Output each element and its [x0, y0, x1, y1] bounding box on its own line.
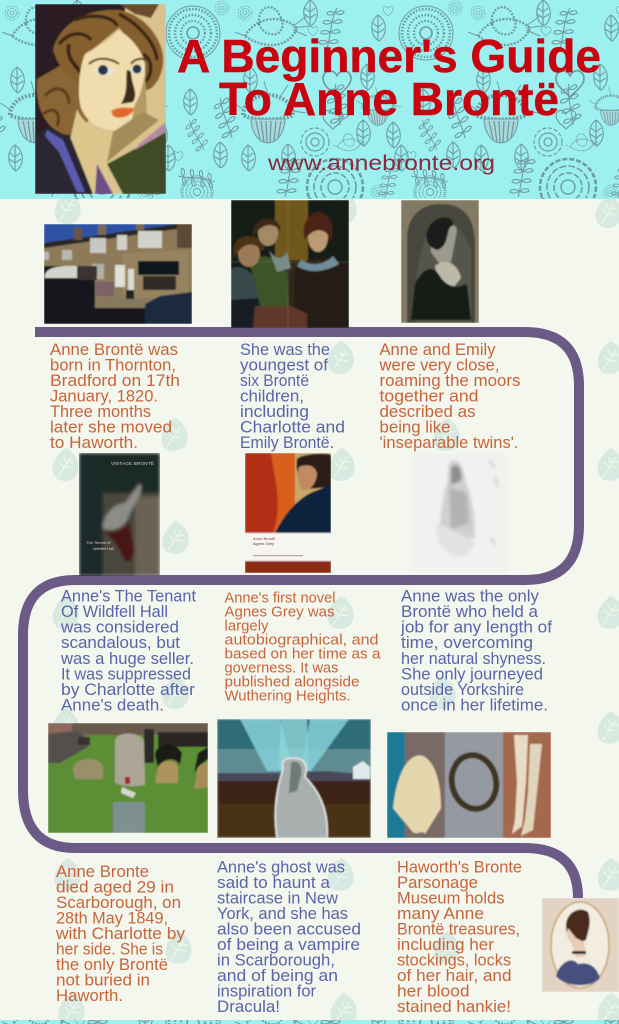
portrait: painted Anne Brontë — [35, 4, 166, 194]
text: ghost and vampire: also been accused — [217, 920, 361, 938]
text: job and shyness: once in her lifetime. — [401, 696, 548, 714]
text: death at Scarborough: with Charlotte by — [55, 925, 186, 943]
text: Tenant of Wildfell Hall: was a huge seller. — [60, 650, 194, 668]
text: ghost and vampire: Anne's ghost was — [217, 858, 345, 876]
photo: Brontë sisters group portrait — [231, 200, 349, 328]
text: job and shyness: job for any length of — [400, 618, 552, 636]
text: youngest child: six Brontë — [240, 372, 309, 390]
text: Anne and Emily: 'inseparable twins'. — [380, 434, 518, 452]
background leaf pattern — [53, 191, 619, 1024]
text: job and shyness — [400, 588, 552, 714]
text: birth: born in Thornton, — [50, 356, 176, 374]
image: Anne's ghost on the moors — [217, 719, 371, 838]
text: job and shyness: her natural shyness. — [401, 650, 546, 668]
bottom patterned strip — [0, 1020, 619, 1024]
text: Parsonage Museum treasures — [397, 858, 522, 1016]
book cover: Agnes Grey — [245, 453, 331, 573]
text: Agnes Grey: Agnes Grey was — [224, 604, 334, 620]
text: Agnes Grey — [224, 590, 381, 704]
text: death at Scarborough: not buried in — [56, 972, 150, 990]
book cover: Agnes Grey: Anne Brontë — [253, 536, 276, 541]
text: Agnes Grey: published alongside — [224, 674, 360, 690]
text: ghost and vampire — [217, 858, 361, 1016]
text: job and shyness: Brontë who held a — [401, 603, 539, 621]
text: ghost and vampire: in Scarborough, — [217, 952, 335, 970]
text: death at Scarborough: Scarborough, on — [56, 894, 181, 912]
book cover: The Tenant of Wildfell Hall: The Tenant of — [86, 540, 111, 545]
text: death at Scarborough: her side. She is — [56, 940, 163, 958]
text: Anne and Emily: roaming the moors — [380, 372, 520, 390]
text: job and shyness: time, overcoming — [401, 634, 533, 652]
text: Parsonage Museum treasures: many Anne — [397, 905, 484, 923]
text: ghost and vampire: staircase in New — [217, 890, 338, 908]
text: job and shyness: Anne was the only — [401, 588, 540, 606]
text: death at Scarborough: the only Brontë — [56, 956, 168, 974]
text: youngest child: including — [240, 403, 309, 421]
text: death at Scarborough: 28th May 1849, — [56, 910, 168, 928]
text: job and shyness: She only journeyed — [401, 666, 543, 684]
text: birth — [50, 341, 180, 452]
book cover: The Tenant of Wildfell Hall: VINTAGE BRONTË — [111, 461, 154, 466]
title: A Beginner's Guide — [177, 30, 601, 82]
text: birth: later she moved — [50, 418, 172, 436]
text: Tenant of Wildfell Hall: It was suppressed — [61, 666, 191, 684]
title — [177, 30, 601, 125]
image: oval miniature portrait of Anne — [542, 898, 619, 992]
text: Agnes Grey: governess. It was — [224, 660, 338, 676]
photo: Anne's grave at Scarborough — [48, 723, 208, 833]
text: birth: to Haworth. — [50, 434, 138, 452]
text: Parsonage Museum treasures: stockings, locks — [397, 952, 511, 970]
text: youngest child: youngest of — [240, 356, 328, 374]
text: ghost and vampire: Dracula! — [217, 998, 280, 1016]
text: ghost and vampire: York, and she has — [217, 905, 348, 923]
text: birth: Three months — [50, 403, 151, 421]
text: death at Scarborough — [55, 863, 186, 1005]
text: Parsonage Museum treasures: Parsonage — [397, 874, 478, 892]
text: Anne and Emily: together and — [380, 388, 478, 406]
text: Anne and Emily: were very close, — [378, 356, 500, 374]
text: birth: Anne Brontë was — [50, 341, 178, 359]
book cover: The Tenant of Wildfell Hall — [79, 453, 160, 576]
text: Anne and Emily: being like — [380, 418, 450, 436]
text: Parsonage Museum treasures: Museum holds — [397, 890, 504, 908]
photo: Thornton birthplace house — [44, 224, 192, 324]
text: Anne and Emily: Anne and Emily — [380, 341, 496, 359]
text: Tenant of Wildfell Hall: by Charlotte after — [61, 681, 196, 699]
timeline: winding purple path — [23, 332, 579, 898]
text: ghost and vampire: of being a vampire — [217, 936, 360, 954]
text: Parsonage Museum treasures: Brontë treasures, — [397, 920, 520, 938]
text: Tenant of Wildfell Hall: Anne's death. — [61, 696, 164, 714]
website address: www.annebronte.org — [267, 152, 495, 175]
text: youngest child: Emily Brontë. — [240, 434, 334, 452]
text: Parsonage Museum treasures: her blood — [397, 982, 470, 1000]
text: Anne and Emily: described as — [380, 403, 476, 421]
panel: header banner — [0, 0, 619, 199]
text: Parsonage Museum treasures: stained hankie! — [397, 998, 511, 1016]
text: Tenant of Wildfell Hall: Of Wildfell Hall — [61, 603, 168, 621]
text: ghost and vampire: inspiration for — [217, 982, 316, 1000]
text: Tenant of Wildfell Hall — [60, 588, 196, 714]
text: Agnes Grey: largely — [224, 618, 269, 634]
text: youngest child: Charlotte and — [240, 418, 345, 436]
text: birth: January, 1820. — [50, 388, 158, 406]
text: Parsonage Museum treasures: including her — [397, 936, 495, 954]
title: To Anne Brontë — [219, 73, 559, 125]
image: Emily Brontë engraving — [401, 200, 479, 323]
photo: museum treasures — [387, 732, 551, 838]
text: Parsonage Museum treasures: of her hair, and — [397, 967, 512, 985]
text: Tenant of Wildfell Hall: Anne's The Tenant — [61, 588, 196, 606]
text: job and shyness: outside Yorkshire — [401, 681, 524, 699]
text: birth: Bradford on 17th — [50, 372, 180, 390]
book cover: The Tenant of Wildfell Hall: Wildfell Hall — [93, 546, 114, 551]
text: youngest child: She was the — [240, 341, 330, 359]
text: Tenant of Wildfell Hall: was considered — [60, 618, 179, 636]
image: pencil sketch of Anne — [435, 458, 500, 558]
text: Agnes Grey: autobiographical, and — [224, 632, 378, 648]
text: death at Scarborough: Anne Bronte — [56, 863, 149, 881]
text: death at Scarborough: died aged 29 in — [56, 878, 174, 896]
text: youngest child: children, — [240, 388, 304, 406]
text: Tenant of Wildfell Hall: scandalous, but — [61, 634, 180, 652]
text: ghost and vampire: said to haunt a — [217, 874, 331, 892]
text: Anne and Emily — [378, 341, 520, 452]
text: Agnes Grey: Wuthering Heights. — [224, 688, 350, 704]
text: ghost and vampire: and of being an — [217, 967, 338, 985]
text: youngest child — [240, 341, 345, 452]
text: Parsonage Museum treasures: Haworth's Bronte — [397, 858, 522, 876]
book cover: Agnes Grey: Agnes Grey — [253, 541, 274, 546]
text: death at Scarborough: Haworth. — [56, 987, 123, 1005]
text: Agnes Grey: based on her time as a — [224, 646, 381, 662]
text: Agnes Grey: Anne's first novel — [224, 590, 336, 606]
